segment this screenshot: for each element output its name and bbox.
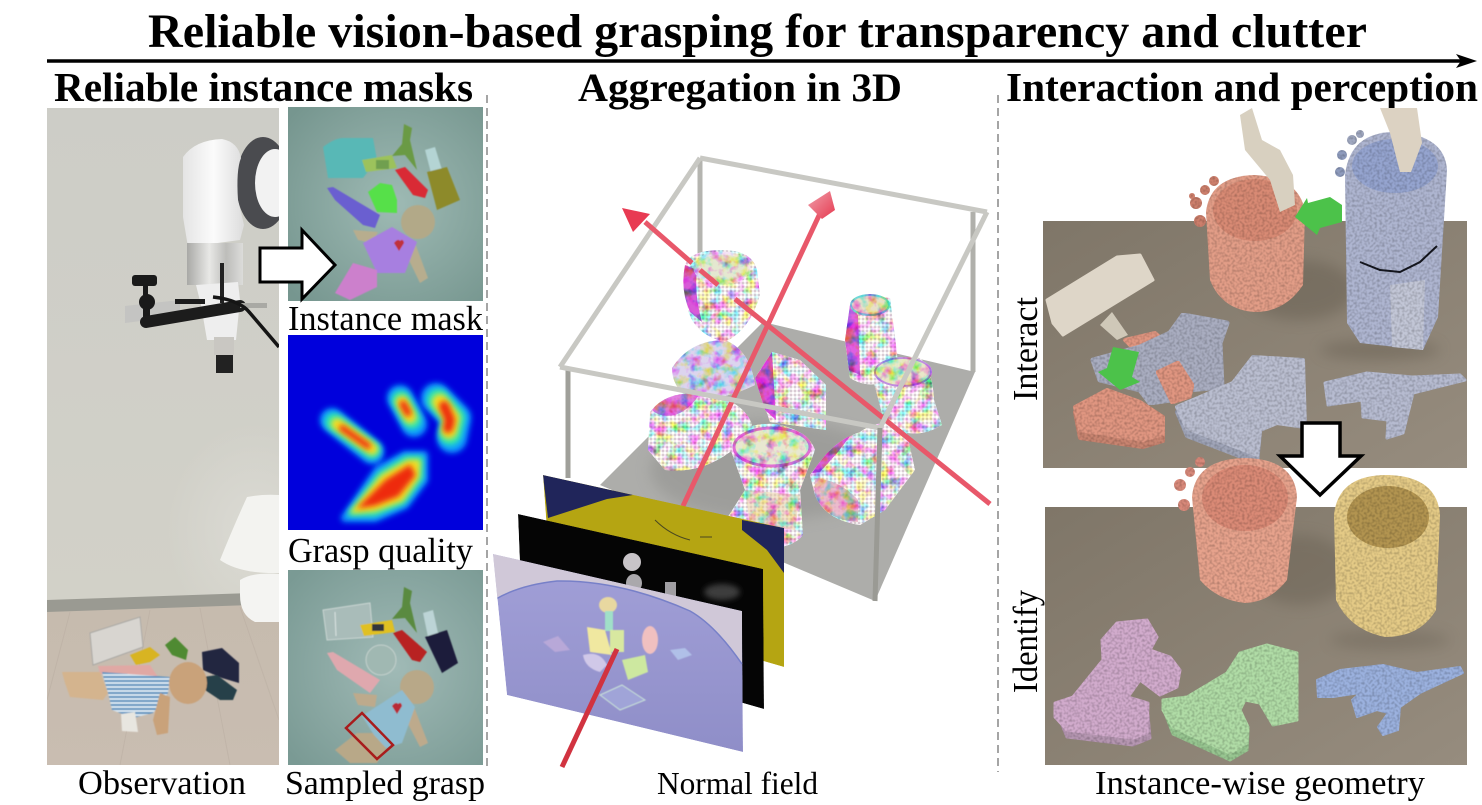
red car xyxy=(393,630,427,662)
blue dinosaur xyxy=(1317,665,1463,735)
label: interact: Interact xyxy=(1006,297,1045,401)
yellow mug xyxy=(1334,475,1440,637)
heat blob core xyxy=(342,404,450,508)
icon: table lamp xyxy=(220,495,279,622)
salmon fragment xyxy=(1157,362,1193,403)
teddy bear xyxy=(335,670,434,763)
heat blob warm xyxy=(337,402,452,512)
heat blob outer xyxy=(332,398,456,518)
camera mount xyxy=(125,275,279,347)
cup 2 xyxy=(845,295,899,384)
cream gripper on salmon mug xyxy=(1240,108,1295,212)
panel: identify scene xyxy=(1045,457,1467,765)
caption: normal field: Normal field xyxy=(657,765,818,801)
glass xyxy=(90,617,143,665)
toy car xyxy=(130,647,160,665)
title: Reliable vision-based grasping for transparency and clutter xyxy=(148,5,1367,58)
cream gripper on blue mug xyxy=(1380,108,1422,172)
label: identify: Identify xyxy=(1006,590,1045,693)
clear glass xyxy=(323,603,373,640)
feature sheet: black depth map xyxy=(518,514,764,709)
mask: red car xyxy=(395,167,428,198)
voxel grid floor xyxy=(600,322,975,601)
dark car xyxy=(203,675,237,700)
green push arrow xyxy=(1098,347,1140,390)
shadows xyxy=(1250,535,1450,650)
cup 4 xyxy=(672,340,755,399)
timeline arrow xyxy=(47,54,1477,68)
pink flat object xyxy=(1055,620,1180,745)
mask: dinosaur xyxy=(392,124,417,170)
3D bounding box front edges xyxy=(560,212,987,601)
dinosaur xyxy=(1325,373,1465,438)
mask: toy car xyxy=(362,155,397,172)
panel: sampled grasp xyxy=(288,570,483,765)
feature sheet: yellow xyxy=(543,475,784,667)
panel: observation photo xyxy=(47,108,279,765)
light blue flat object xyxy=(1177,357,1305,463)
caption: observation: Observation xyxy=(78,765,246,802)
toy car xyxy=(360,620,395,636)
teddy bear xyxy=(62,662,207,735)
robot arm xyxy=(183,137,279,373)
caption: sampled grasp: Sampled grasp xyxy=(285,765,485,802)
white arrow: interact to identify xyxy=(1280,423,1361,495)
cup 1 xyxy=(683,250,760,342)
feature sheet: surface normals xyxy=(493,554,743,752)
mask: cup xyxy=(323,138,377,178)
caption: instance mask: Instance mask xyxy=(288,299,483,338)
cream side gripper xyxy=(1047,255,1153,340)
caption: instance-wise geometry: Instance-wise geometry xyxy=(1095,765,1425,802)
clear lid xyxy=(366,645,396,675)
red arrow: horizontal axis xyxy=(622,208,990,504)
cup 7 xyxy=(726,424,815,548)
heading: reliable instance masks: Reliable instance masks xyxy=(54,64,473,110)
cup shadows xyxy=(650,420,890,520)
panel: grasp quality heatmap xyxy=(288,335,483,530)
red arrow: through normal field xyxy=(562,649,617,767)
normal-map objects xyxy=(543,597,692,710)
teddy mask xyxy=(335,205,435,300)
green flat object xyxy=(1163,645,1297,760)
blue mug xyxy=(1335,130,1447,350)
heading: interaction and perception: Interaction and perception xyxy=(1006,64,1478,110)
red arrow: vertical axis xyxy=(683,191,835,506)
mask: green lid xyxy=(368,183,397,213)
dark box xyxy=(202,648,239,683)
mask: purple bottle xyxy=(327,187,380,228)
grasp rectangle xyxy=(346,713,393,759)
dinosaur xyxy=(392,587,417,633)
voxel transparent objects xyxy=(648,250,942,548)
dark bottle xyxy=(425,630,458,673)
mask: spray head xyxy=(425,147,442,173)
pink bottle xyxy=(327,652,380,693)
cup 5 xyxy=(648,392,752,471)
cup 6 xyxy=(755,352,826,430)
salmon mug xyxy=(1189,175,1305,312)
caption: grasp quality: Grasp quality xyxy=(288,531,473,570)
white arrow: observation to mask xyxy=(260,230,335,299)
green push arrow xyxy=(1295,197,1342,235)
panel: instance mask xyxy=(288,107,483,301)
cup 3 xyxy=(872,357,942,434)
dinosaur xyxy=(165,637,188,660)
heading: aggregation in 3D: Aggregation in 3D xyxy=(578,65,902,110)
heat blob mid xyxy=(334,400,454,514)
spray head xyxy=(423,610,438,637)
mask: olive bottle xyxy=(427,167,460,210)
salmon flat object xyxy=(1075,333,1168,447)
grey flat object xyxy=(1093,315,1227,403)
3D bounding box back edges xyxy=(560,158,987,478)
clutter on table xyxy=(62,617,239,735)
panel: interact scene xyxy=(1043,108,1467,468)
shadows xyxy=(1245,260,1440,360)
cup 8 xyxy=(810,423,915,525)
salmon mug xyxy=(1174,457,1297,603)
